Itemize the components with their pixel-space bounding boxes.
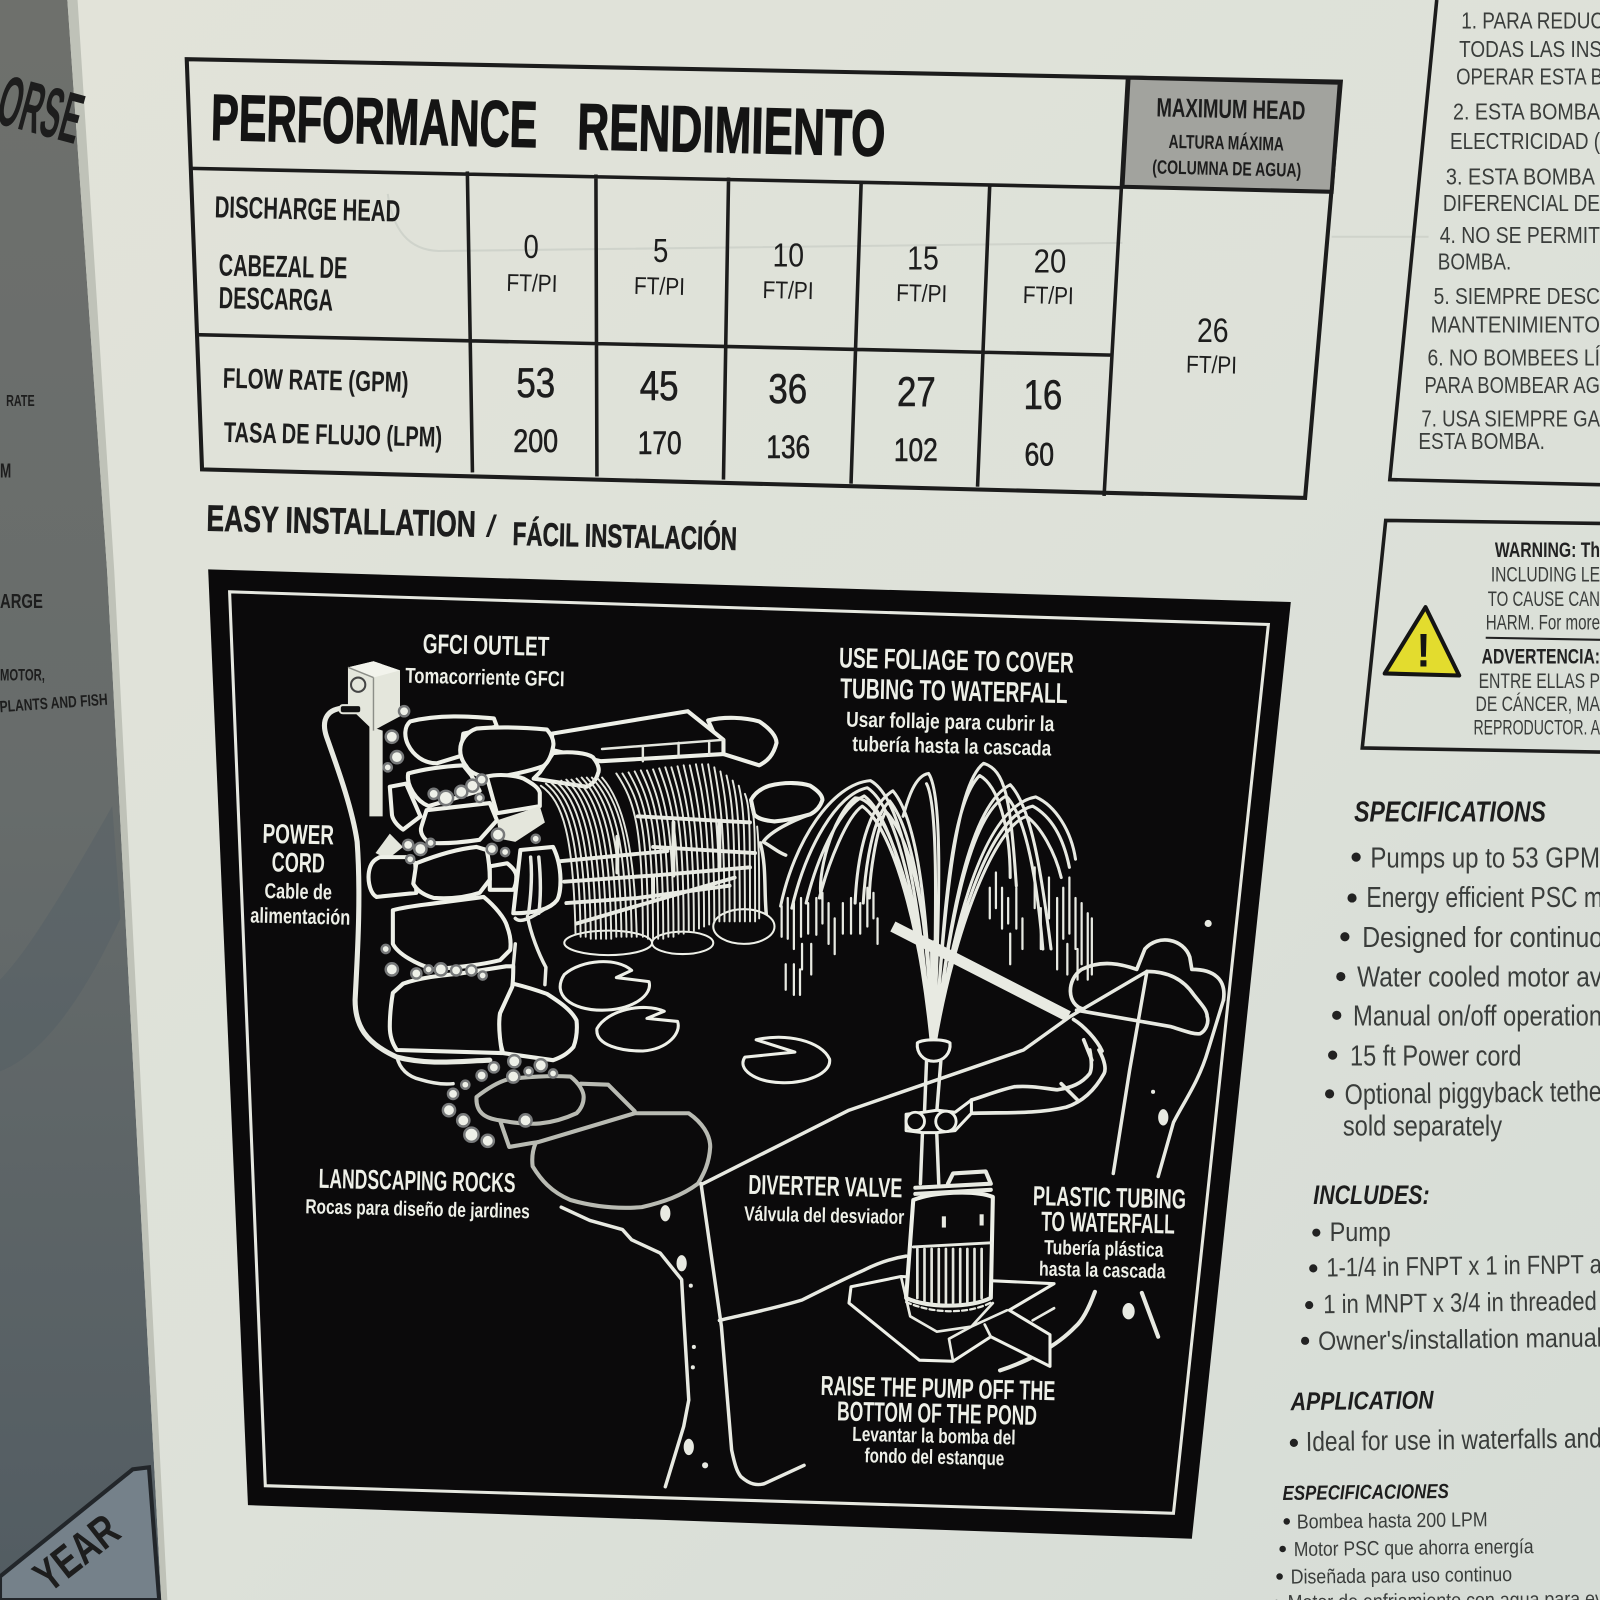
label: gfci outlet <box>405 628 565 691</box>
heading: includes: INCLUDES: <box>1313 1180 1430 1210</box>
panel: installation diagram <box>208 569 1291 1539</box>
label: use foliage <box>839 642 1074 761</box>
label: use foliage: Usar follaje para cubrir la <box>846 708 1055 736</box>
head values: FT/PI <box>634 273 685 301</box>
heading: easy installation: / <box>486 510 498 544</box>
row label: discharge head <box>214 190 401 318</box>
label: power cord: alimentación <box>250 903 351 930</box>
label: raise the pump <box>820 1370 1056 1470</box>
flow values lpm: 170 <box>638 424 682 461</box>
flow values lpm: 200 <box>513 422 558 459</box>
panel: warning <box>1362 520 1600 752</box>
illustration: diverter valve <box>906 1040 971 1184</box>
panel: safety instructions: ESTA BOMBA. <box>1418 428 1545 454</box>
specifications <box>1273 796 1600 1600</box>
maximum head value: 26 <box>1197 312 1229 350</box>
head values <box>506 229 1074 310</box>
warning text <box>1473 538 1600 740</box>
head values: 20 <box>1034 243 1066 280</box>
head values: 10 <box>772 237 804 274</box>
label: landscaping rocks: LANDSCAPING ROCKS <box>318 1163 516 1198</box>
maximum head box <box>1122 78 1340 192</box>
side text fragments: PLANTS AND FISH <box>0 691 108 716</box>
label: power cord: Cable de <box>264 879 332 904</box>
label: raise the pump: Levantar la bomba del <box>852 1424 1016 1450</box>
label: raise the pump: BOTTOM OF THE POND <box>837 1395 1037 1431</box>
heading: easy installation: FÁCIL INSTALACIÓN <box>512 515 738 557</box>
heading: easy installation <box>206 498 738 557</box>
side text fragments <box>0 393 108 716</box>
flow values gpm: 27 <box>897 368 936 415</box>
label: diverter valve <box>744 1169 905 1229</box>
row label: discharge head: DESCARGA <box>218 281 333 318</box>
label: landscaping rocks: Rocas para diseño de jardines <box>305 1196 530 1223</box>
illustration: power cord <box>324 708 490 1062</box>
icon: warning triangle: ! <box>1416 624 1431 676</box>
specification bullets: sold separately <box>1343 1111 1503 1143</box>
label: raise the pump: fondo del estanque <box>864 1445 1005 1470</box>
head values: FT/PI <box>896 280 948 308</box>
illustration: submersible pump <box>849 1171 1054 1366</box>
heading: application: APPLICATION <box>1290 1386 1434 1416</box>
illustration: waterfall <box>541 764 774 955</box>
label: use foliage: TUBING TO WATERFALL <box>840 673 1068 710</box>
side text fragments: RATE <box>6 393 35 410</box>
row label: flow rate: FLOW RATE (GPM) <box>222 363 409 399</box>
label: plastic tubing: hasta la cascada <box>1039 1259 1166 1283</box>
maximum head value <box>1186 312 1237 380</box>
maximum head box: ALTURA MÁXIMA <box>1168 130 1284 156</box>
label: gfci outlet: Tomacorriente GFCI <box>405 664 565 691</box>
heading: performance: PERFORMANCE <box>210 81 538 161</box>
includes bullets <box>1301 1217 1600 1356</box>
label: use foliage: tubería hasta la cascada <box>852 732 1052 761</box>
panel: safety instructions <box>1390 0 1600 485</box>
label: raise the pump: RAISE THE PUMP OFF THE <box>820 1370 1056 1406</box>
label: use foliage: USE FOLIAGE TO COVER <box>839 642 1074 680</box>
flow values gpm: 45 <box>640 362 679 409</box>
panel: safety instructions: BOMBA. <box>1438 248 1511 274</box>
head values: FT/PI <box>762 277 814 305</box>
head values: 0 <box>523 229 539 266</box>
row label: flow rate <box>222 363 443 454</box>
side text fragments: MOTOR, <box>0 667 45 685</box>
head values: FT/PI <box>1022 282 1074 310</box>
flow values gpm <box>516 359 1062 418</box>
spanish specification bullets: Bombea hasta 200 LPM <box>1297 1509 1488 1534</box>
spanish specification bullets <box>1273 1509 1600 1600</box>
label: power cord: CORD <box>271 846 325 879</box>
flow values lpm: 60 <box>1024 435 1054 472</box>
maximum head box: (COLUMNA DE AGUA) <box>1152 156 1301 182</box>
label: plastic tubing <box>1033 1180 1186 1283</box>
side text fragments: ARGE <box>0 591 43 613</box>
head values: FT/PI <box>506 270 558 298</box>
includes bullets: Pump <box>1330 1217 1391 1247</box>
flow values lpm: 136 <box>766 428 810 465</box>
label: diverter valve: DIVERTER VALVE <box>748 1169 903 1203</box>
illustration: gfci outlet post <box>340 661 400 816</box>
fold mark <box>388 194 1429 251</box>
icon: warning triangle <box>1385 607 1459 676</box>
specification bullets <box>1325 842 1600 1143</box>
flow values lpm <box>513 422 1054 472</box>
flow values gpm: 16 <box>1023 371 1062 418</box>
label: diverter valve: Válvula del desviador <box>744 1203 905 1229</box>
warranty badge: YEAR <box>24 1504 129 1600</box>
spanish specification bullets: Motor PSC que ahorra energía <box>1294 1536 1534 1561</box>
label: plastic tubing: Tubería plástica <box>1044 1237 1164 1262</box>
heading: performance: RENDIMIENTO <box>577 90 886 170</box>
label: plastic tubing: TO WATERFALL <box>1041 1206 1175 1240</box>
row label: discharge head: CABEZAL DE <box>218 249 348 285</box>
spanish specification bullets: Diseñada para uso continuo <box>1291 1564 1512 1589</box>
label: landscaping rocks <box>305 1163 530 1223</box>
maximum head value: FT/PI <box>1186 351 1237 380</box>
flow values gpm: 53 <box>516 359 555 406</box>
specification bullets: 15 ft Power cord <box>1350 1040 1521 1072</box>
flow values gpm: 36 <box>768 365 807 412</box>
heading: specifications: SPECIFICATIONS <box>1354 796 1546 828</box>
label: power cord: POWER <box>262 818 334 850</box>
head values: 5 <box>653 233 668 270</box>
panel: left side of box <box>0 0 167 1600</box>
table grid <box>187 59 1341 498</box>
heading: especificaciones: ESPECIFICACIONES <box>1282 1481 1449 1505</box>
heading: easy installation: EASY INSTALLATION <box>206 498 476 545</box>
label: gfci outlet: GFCI OUTLET <box>422 628 550 662</box>
flow values lpm: 102 <box>894 431 938 468</box>
side text fragments: M <box>0 461 11 483</box>
performance table <box>187 59 1341 498</box>
illustration: lily pads <box>560 962 830 1083</box>
label: power cord <box>250 818 351 930</box>
label: plastic tubing: PLASTIC TUBING <box>1033 1180 1186 1215</box>
head values: 15 <box>907 240 939 277</box>
row label: flow rate: TASA DE FLUJO (LPM) <box>223 417 443 454</box>
illustration: tubing and pond outline <box>561 920 1224 1487</box>
maximum head box: MAXIMUM HEAD <box>1156 92 1306 126</box>
row label: discharge head: DISCHARGE HEAD <box>214 190 401 229</box>
illustration: landscaping rocks <box>369 711 822 1208</box>
illustration: flowers on rocks <box>382 706 557 1147</box>
illustration: fountain <box>781 763 1092 1046</box>
